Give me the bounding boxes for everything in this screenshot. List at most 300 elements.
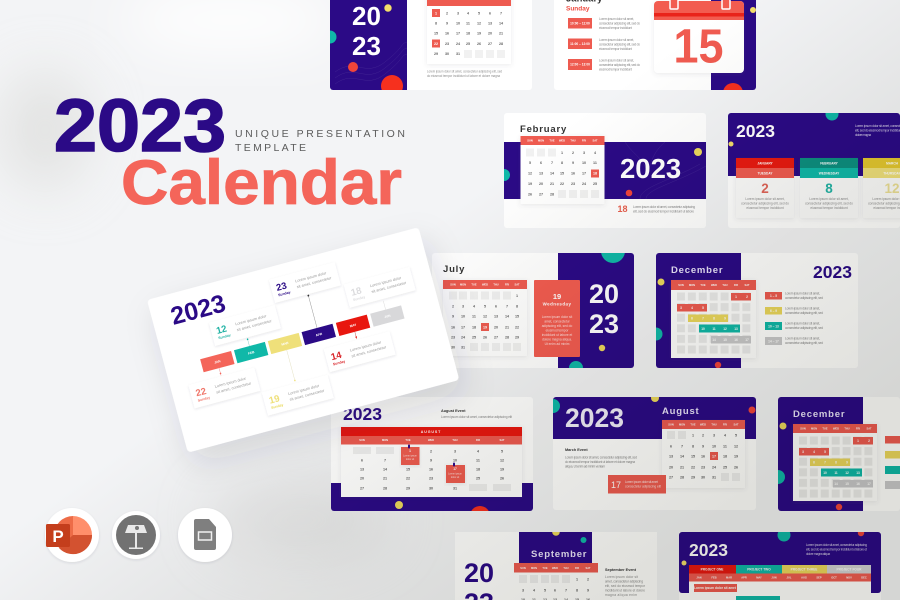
sticky note: 17th: dolor sit bbox=[451, 476, 460, 479]
heading December: December bbox=[793, 409, 845, 420]
card: 22: sit amet, consectetur bbox=[216, 380, 252, 395]
calendar card: 30 bbox=[445, 52, 449, 56]
calendar card: 18 bbox=[466, 32, 470, 36]
calendar card: 17 bbox=[456, 32, 460, 36]
calendar table: AUGUST bbox=[421, 430, 441, 434]
timeline table: SEP bbox=[816, 576, 822, 580]
timeline table: PROJECT TWO bbox=[747, 567, 771, 571]
time slots: 11:00 – 12:00 bbox=[570, 42, 590, 46]
calendar card: MON bbox=[538, 139, 544, 143]
calendar card: SUN bbox=[800, 427, 806, 431]
calendar card: SAT bbox=[866, 427, 872, 431]
calendar card: 27 bbox=[494, 335, 498, 339]
calendar card: 2 bbox=[452, 304, 454, 308]
icon: calendar page 15: 15 bbox=[674, 20, 724, 74]
calendar card: 7 bbox=[506, 304, 508, 308]
card: 14: sit amet, consectetur bbox=[351, 344, 387, 358]
calendar table: 21 bbox=[383, 476, 387, 480]
month bars: JUN bbox=[384, 313, 392, 319]
calendar card: 9 bbox=[724, 316, 726, 320]
sticky note: 17th: Lorem ipsum bbox=[448, 472, 462, 476]
calendar card: 20 bbox=[494, 325, 498, 329]
calendar card: 6 bbox=[489, 11, 491, 15]
calendar card: 19 bbox=[528, 182, 532, 186]
legend: consectetur adipiscing elit, sed bbox=[785, 311, 823, 315]
caption: Lorem ipsum dolor sit amet, consectetur adipiscing elit, sed bbox=[427, 70, 502, 74]
calendar card: 3 bbox=[680, 306, 682, 310]
calendar card: 8 bbox=[576, 588, 578, 592]
calendar table: 28 bbox=[383, 486, 387, 490]
intro text: dolore magna aliqua bbox=[806, 552, 830, 556]
dots bbox=[569, 253, 625, 368]
calendar table: 13 bbox=[360, 468, 364, 472]
calendar card: SAT bbox=[592, 139, 598, 143]
icon: Keynote bbox=[112, 511, 160, 559]
calendar card: TUE bbox=[822, 427, 828, 431]
calendar card bbox=[514, 563, 598, 600]
calendar card: MON bbox=[689, 283, 695, 287]
time slots: 10:00 – 11:00 bbox=[570, 22, 590, 26]
timeline table: PROJECT THREE bbox=[791, 567, 817, 571]
event heading: March Event bbox=[565, 448, 588, 452]
title: Calendar: Calendar bbox=[121, 148, 402, 218]
calendar card: 6 bbox=[540, 161, 542, 165]
sticky note: 17th bbox=[446, 462, 465, 483]
timeline table: Lorem ipsum dolor sit amet bbox=[694, 586, 737, 590]
calendar card: 22 bbox=[691, 465, 695, 469]
calendar card: 16 bbox=[856, 482, 860, 486]
calendar card: FRI bbox=[856, 427, 860, 431]
year 20: 20 bbox=[589, 279, 619, 309]
schedule notes: Lorem ipsum dolor sit amet, bbox=[599, 17, 634, 21]
year: 2023 bbox=[565, 403, 624, 433]
heading February: February bbox=[520, 124, 567, 135]
calendar table: 2 bbox=[430, 449, 432, 453]
calendar card: 16 bbox=[734, 338, 738, 342]
legend bbox=[765, 292, 823, 345]
calendar table: 23 bbox=[429, 476, 433, 480]
event note: Lorem ipsum dolor sit amet, consectetur adipiscing bbox=[633, 205, 695, 209]
calendar table: 19 bbox=[500, 468, 504, 472]
timeline table: MAR bbox=[726, 576, 732, 580]
calendar table: WED bbox=[428, 438, 434, 442]
card: February: eiusmod tempor incididunt bbox=[810, 206, 848, 210]
calendar card: SAT bbox=[734, 423, 739, 427]
calendar card: 15 bbox=[434, 32, 438, 36]
calendar card: 10 bbox=[823, 471, 827, 475]
event card: eiusmod tempor bbox=[546, 328, 569, 332]
calendar card: WED bbox=[482, 283, 488, 287]
subtitle bbox=[235, 128, 405, 154]
calendar card: 5 bbox=[735, 433, 737, 437]
year: 2023 bbox=[168, 289, 229, 331]
card: February bbox=[800, 158, 858, 218]
caption bbox=[427, 70, 502, 78]
calendar card: 30 bbox=[451, 345, 455, 349]
slide: February bbox=[498, 113, 706, 228]
calendar card: SAT bbox=[514, 283, 520, 287]
calendar card: 7 bbox=[551, 161, 553, 165]
calendar card: 15 bbox=[723, 338, 727, 342]
slide: yearly timeline bbox=[679, 528, 881, 600]
calendar table: 18 bbox=[476, 468, 480, 472]
calendar card: SUN bbox=[678, 283, 684, 287]
calendar card: 22 bbox=[560, 182, 564, 186]
icon: PowerPoint: P bbox=[52, 527, 64, 546]
calendar card: 1 bbox=[857, 439, 859, 443]
calendar card bbox=[443, 280, 527, 356]
calendar card: 25 bbox=[472, 335, 476, 339]
calendar card: 5 bbox=[478, 11, 480, 15]
calendar table: 15 bbox=[406, 468, 410, 472]
calendar card: 8 bbox=[713, 316, 715, 320]
calendar card: 2 bbox=[702, 433, 704, 437]
calendar card: 6 bbox=[554, 588, 556, 592]
year: 2023 bbox=[813, 262, 852, 282]
time slots bbox=[568, 18, 592, 70]
calendar card: 2 bbox=[587, 577, 589, 581]
calendar table: THU bbox=[452, 438, 458, 442]
calendar card: FRI bbox=[582, 139, 586, 143]
calendar card: 4 bbox=[691, 306, 693, 310]
calendar card: SAT bbox=[586, 566, 591, 570]
calendar card: 19 bbox=[734, 454, 738, 458]
card: 14: Lorem ipsum dolor bbox=[349, 339, 382, 353]
event card: 19 bbox=[553, 292, 561, 301]
sticky note: 1st: 1 bbox=[409, 449, 411, 453]
timeline table: DEC bbox=[861, 576, 867, 580]
caption: do eiusmod tempor incididunt ut labore et dolore magna bbox=[427, 74, 500, 78]
legend: 1 – 5 bbox=[770, 294, 777, 298]
calendar table: 11 bbox=[476, 458, 480, 462]
calendar card: 13 bbox=[669, 454, 673, 458]
calendar card: 13 bbox=[494, 314, 498, 318]
calendar card: 26 bbox=[528, 192, 532, 196]
legend: Lorem ipsum dolor sit amet, bbox=[785, 306, 820, 310]
calendar card: 11 bbox=[712, 327, 716, 331]
calendar card: MON bbox=[679, 423, 685, 427]
calendar table: 9 bbox=[430, 458, 432, 462]
calendar card: 6 bbox=[813, 460, 815, 464]
slide: August event calendar bbox=[331, 397, 533, 511]
calendar card: 17 bbox=[582, 172, 586, 176]
calendar card: FRI bbox=[575, 566, 579, 570]
event callout 17: Lorem ipsum dolor sit amet bbox=[625, 480, 658, 484]
timeline table: PROJECT ONE bbox=[701, 567, 723, 571]
card: 12 bbox=[209, 305, 281, 346]
calendar card: FRI bbox=[734, 283, 738, 287]
calendar card: 1 bbox=[561, 151, 563, 155]
legend: consectetur adipiscing elit, sed bbox=[785, 341, 823, 345]
calendar card: 12 bbox=[734, 444, 738, 448]
slide: January schedule bbox=[554, 0, 756, 90]
calendar card: 8 bbox=[835, 460, 837, 464]
calendar card: 6 bbox=[495, 304, 497, 308]
calendar card: 12 bbox=[528, 172, 532, 176]
schedule notes: consectetur adipiscing elit, sed do bbox=[599, 63, 640, 67]
calendar card: 8 bbox=[435, 21, 437, 25]
calendar card: 25 bbox=[723, 465, 727, 469]
calendar table: 30 bbox=[429, 486, 433, 490]
slide: monthly cards bbox=[728, 108, 900, 228]
event text: Lorem ipsum dolor sit bbox=[605, 575, 638, 579]
month bars: MAY bbox=[349, 322, 358, 328]
heading September: September bbox=[531, 549, 587, 560]
card: 18: Sunday bbox=[353, 295, 366, 302]
calendar card: 9 bbox=[587, 588, 589, 592]
intro text: Lorem ipsum dolor sit amet, consectetur adipiscing bbox=[806, 543, 867, 547]
year: 2023 bbox=[689, 540, 728, 560]
dots bbox=[395, 501, 490, 526]
calendar card: 13 bbox=[539, 172, 543, 176]
schedule notes: eiusmod tempor incididunt bbox=[599, 47, 632, 51]
calendar card: 3 bbox=[462, 304, 464, 308]
calendar card: FRI bbox=[505, 283, 509, 287]
calendar card: 4 bbox=[467, 11, 470, 15]
calendar card: 23 bbox=[451, 335, 455, 339]
card: February: Lorem ipsum dolor sit amet, bbox=[809, 197, 849, 201]
calendar card: THU bbox=[722, 283, 728, 287]
calendar card: 21 bbox=[505, 325, 509, 329]
calendar card: 28 bbox=[550, 192, 554, 196]
connectors bbox=[206, 276, 398, 400]
card: 22: Sunday bbox=[197, 396, 211, 403]
month bars: APR bbox=[315, 332, 323, 338]
heading July: July bbox=[443, 264, 465, 275]
calendar card: 18 bbox=[472, 325, 476, 329]
card: 12: sit amet, consectetur bbox=[236, 318, 273, 332]
calendar card: 8 bbox=[516, 304, 518, 308]
legend: consectetur adipiscing elit, sed bbox=[785, 326, 823, 330]
schedule notes: Lorem ipsum dolor sit amet, bbox=[599, 58, 634, 62]
event card: adipiscing elit, sed do bbox=[542, 324, 572, 328]
legend: Lorem ipsum dolor sit amet, bbox=[785, 322, 820, 326]
calendar table: 7 bbox=[384, 458, 386, 462]
card: 18: 18 bbox=[350, 285, 363, 299]
calendar card: SUN bbox=[450, 283, 456, 287]
card: 14: 14 bbox=[330, 350, 344, 363]
calendar card: 7 bbox=[702, 316, 704, 320]
calendar card: MON bbox=[811, 427, 817, 431]
calendar card: 3 bbox=[522, 588, 524, 592]
timeline table: NOV bbox=[846, 576, 852, 580]
calendar card: 8 bbox=[561, 161, 563, 165]
event text: amet, consectetur adipiscing bbox=[605, 580, 643, 584]
slide: December schedule cropped bbox=[771, 397, 900, 511]
calendar card: 16 bbox=[701, 454, 705, 458]
card: February: WEDNESDAY bbox=[819, 172, 840, 176]
calendar card: 20 bbox=[669, 465, 673, 469]
calendar card: THU bbox=[844, 427, 850, 431]
card: January: TUESDAY bbox=[758, 172, 773, 176]
calendar card: 3 bbox=[713, 433, 715, 437]
calendar card: 16 bbox=[571, 172, 575, 176]
calendar table: 14 bbox=[383, 468, 388, 472]
calendar card: 7 bbox=[681, 444, 683, 448]
calendar card: TUE bbox=[471, 283, 477, 287]
schedule notes: eiusmod tempor incididunt bbox=[599, 26, 632, 30]
calendar table: 3 bbox=[454, 449, 456, 453]
calendar card: 11 bbox=[593, 161, 597, 165]
calendar card: 4 bbox=[594, 151, 597, 155]
calendar card: 7 bbox=[565, 588, 567, 592]
calendar card: 31 bbox=[456, 52, 460, 56]
legend: Lorem ipsum dolor sit amet, bbox=[785, 336, 820, 340]
card: 23: Sunday bbox=[278, 290, 291, 297]
calendar card: 20 bbox=[488, 32, 492, 36]
card: 22 bbox=[188, 368, 260, 408]
calendar card: WED bbox=[552, 566, 558, 570]
calendar table: MON bbox=[382, 438, 388, 442]
event text: incididunt ut labore et dolore bbox=[605, 588, 645, 592]
card: 18 bbox=[344, 267, 416, 308]
calendar card: MON bbox=[531, 566, 537, 570]
heading August: August bbox=[662, 406, 700, 417]
dots bbox=[728, 113, 838, 146]
calendar card: WED bbox=[700, 423, 706, 427]
calendar card: SAT bbox=[744, 283, 750, 287]
timeline table bbox=[689, 565, 871, 600]
card: 12: Lorem ipsum dolor bbox=[235, 313, 268, 326]
calendar card: 4 bbox=[724, 433, 727, 437]
calendar card: 2 bbox=[746, 295, 748, 299]
event callout 17: 17 bbox=[611, 480, 621, 490]
calendar table: 26 bbox=[500, 476, 504, 480]
calendar table: SAT bbox=[500, 438, 505, 442]
calendar card: 24 bbox=[461, 335, 466, 339]
calendar table: 6 bbox=[361, 458, 363, 462]
slide: January calendar bbox=[330, 0, 532, 90]
calendar card: 31 bbox=[712, 475, 716, 479]
big year 23: 23 bbox=[352, 31, 381, 61]
calendar card: 24 bbox=[712, 465, 717, 469]
calendar card: 18 bbox=[723, 454, 727, 458]
intro text bbox=[806, 543, 867, 556]
event heading: September Event bbox=[605, 568, 637, 572]
timeline table: FEB bbox=[711, 576, 717, 580]
card: 18: sit amet, consectetur bbox=[371, 280, 407, 294]
card: 19: sit amet, consectetur bbox=[289, 388, 326, 402]
calendar table: SUN bbox=[359, 438, 365, 442]
event heading: August Event bbox=[441, 409, 466, 413]
card: 23: Lorem ipsum dolor bbox=[294, 270, 328, 283]
calendar card: 11 bbox=[834, 471, 838, 475]
card: March: 12 bbox=[884, 181, 900, 196]
calendar card: SUN bbox=[520, 566, 526, 570]
calendar card: 26 bbox=[734, 465, 738, 469]
card: February: FEBRUARY bbox=[820, 162, 839, 166]
event text bbox=[565, 456, 637, 468]
year 20: 20 bbox=[464, 558, 494, 588]
calendar card: 10 bbox=[582, 161, 586, 165]
title: 2023: 2023 bbox=[54, 84, 226, 167]
intro text bbox=[855, 124, 900, 137]
calendar card: 12 bbox=[483, 314, 487, 318]
calendar card: 23 bbox=[571, 182, 575, 186]
schedule notes: consectetur adipiscing elit, sed do bbox=[599, 22, 640, 26]
card: January: Lorem ipsum dolor sit amet, bbox=[745, 197, 785, 201]
calendar card: 27 bbox=[488, 42, 492, 46]
event callout 17 bbox=[608, 475, 666, 494]
timeline table: APR bbox=[741, 576, 747, 580]
sticky note: 17th: 17 bbox=[453, 467, 457, 471]
calendar card: 11 bbox=[472, 314, 476, 318]
calendar card: 16 bbox=[451, 325, 455, 329]
big year 20: 20 bbox=[352, 1, 381, 31]
dots bbox=[771, 422, 842, 510]
schedule notes: Lorem ipsum dolor sit amet, bbox=[599, 38, 634, 42]
calendar card: 11 bbox=[466, 21, 470, 25]
calendar card: 10 bbox=[461, 314, 465, 318]
event note bbox=[633, 205, 695, 214]
calendar table: 10 bbox=[453, 458, 457, 462]
calendar card: 9 bbox=[572, 161, 574, 165]
calendar card: 17 bbox=[461, 325, 465, 329]
calendar card: 12 bbox=[723, 327, 727, 331]
calendar table: 31 bbox=[453, 486, 457, 490]
event card: dolore magna aliqua. bbox=[542, 338, 572, 342]
calendar card: 2 bbox=[868, 439, 870, 443]
icon: calendar page 15 bbox=[654, 0, 744, 74]
calendar table: 12 bbox=[500, 458, 504, 462]
card: March: MARCH bbox=[886, 162, 899, 166]
calendar card: 13 bbox=[488, 21, 492, 25]
calendar card: 18 bbox=[593, 172, 597, 176]
month bars: JAN bbox=[214, 359, 222, 365]
calendar card: 3 bbox=[802, 450, 804, 454]
timeline table: JAN bbox=[696, 576, 702, 580]
card: 18: Lorem ipsum dolor bbox=[369, 275, 402, 288]
calendar card: 23 bbox=[701, 465, 705, 469]
card: 19: Sunday bbox=[271, 403, 284, 410]
calendar card: 7 bbox=[824, 460, 826, 464]
calendar card: THU bbox=[570, 139, 576, 143]
calendar table: 27 bbox=[360, 486, 364, 490]
calendar card: WED bbox=[559, 139, 565, 143]
calendar card: 2 bbox=[572, 151, 574, 155]
calendar table bbox=[341, 427, 522, 497]
calendar card: 26 bbox=[477, 42, 481, 46]
calendar card: 17 bbox=[745, 338, 749, 342]
year: 2023 bbox=[620, 153, 681, 184]
calendar card: 1 bbox=[576, 577, 578, 581]
calendar card: 31 bbox=[461, 345, 465, 349]
calendar card: 14 bbox=[834, 482, 838, 486]
calendar card: THU bbox=[563, 566, 569, 570]
schedule notes bbox=[599, 17, 640, 72]
calendar table: TUE bbox=[405, 438, 411, 442]
sticky note: 1st bbox=[401, 444, 420, 465]
calendar card: 14 bbox=[680, 454, 685, 458]
card: 14: Sunday bbox=[333, 359, 346, 366]
timeline table: OCT bbox=[831, 576, 837, 580]
calendar table: 25 bbox=[476, 476, 480, 480]
calendar card: TUE bbox=[549, 139, 555, 143]
calendar card: 15 bbox=[560, 172, 564, 176]
calendar card: 16 bbox=[445, 32, 449, 36]
calendar card: 17 bbox=[712, 454, 716, 458]
heading December: December bbox=[671, 265, 723, 276]
calendar card: 1 bbox=[735, 295, 737, 299]
event card: Lorem ipsum dolor sit bbox=[542, 315, 572, 319]
calendar card: 14 bbox=[499, 21, 504, 25]
event text bbox=[605, 575, 646, 597]
calendar card: 24 bbox=[582, 182, 587, 186]
calendar card: FRI bbox=[723, 423, 727, 427]
calendar table: 8 bbox=[407, 458, 409, 462]
event text: Lorem ipsum dolor sit amet, consectetur adipiscing elit, sed bbox=[565, 456, 637, 460]
timeline table: MAY bbox=[756, 576, 762, 580]
